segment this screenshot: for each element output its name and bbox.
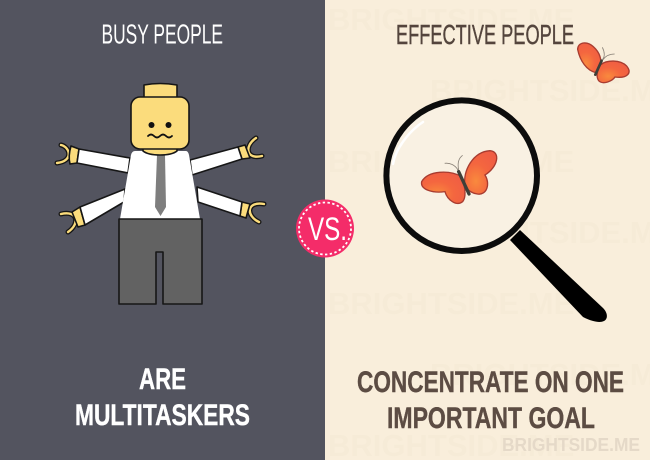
illustration: lego multitasker	[57, 84, 264, 304]
head	[131, 97, 189, 149]
handle	[510, 230, 607, 322]
lower left arm	[61, 189, 125, 232]
heading: busy people: BUSY PEOPLE	[102, 18, 223, 50]
lower right arm	[197, 187, 264, 222]
stud	[144, 84, 177, 100]
icon: magnifying glass	[386, 100, 607, 322]
panel: effective people background	[325, 0, 650, 460]
badge: versus	[296, 200, 354, 258]
icon: butterfly under lens	[422, 151, 497, 203]
caption: are multitaskers	[75, 363, 250, 432]
caption: concentrate on one important goal: IMPORTANT GOAL	[387, 402, 595, 435]
watermarks: BRIGHTSIDE.ME	[328, 286, 574, 321]
icon: small butterfly	[578, 43, 629, 83]
watermarks: BRIGHTSIDE.ME	[328, 2, 574, 37]
caption: are multitaskers: MULTITASKERS	[75, 399, 250, 432]
badge text: VS.	[308, 211, 347, 247]
panel: busy people background	[0, 0, 325, 460]
icon: lego face	[148, 122, 172, 138]
watermark: brightside.me: BRIGHTSIDE.ME	[502, 435, 640, 455]
caption: concentrate on one important goal	[357, 366, 624, 435]
caption: are multitaskers: ARE	[139, 363, 186, 396]
lens	[386, 100, 537, 251]
upper left arm	[57, 145, 130, 173]
pants	[119, 219, 202, 304]
torso	[120, 151, 200, 219]
neck	[143, 146, 177, 155]
watermarks	[328, 2, 650, 460]
upper right arm	[190, 138, 262, 175]
tie	[155, 155, 166, 216]
watermarks: BRIGHTSIDE.ME	[328, 144, 574, 179]
lens shine	[393, 122, 423, 164]
